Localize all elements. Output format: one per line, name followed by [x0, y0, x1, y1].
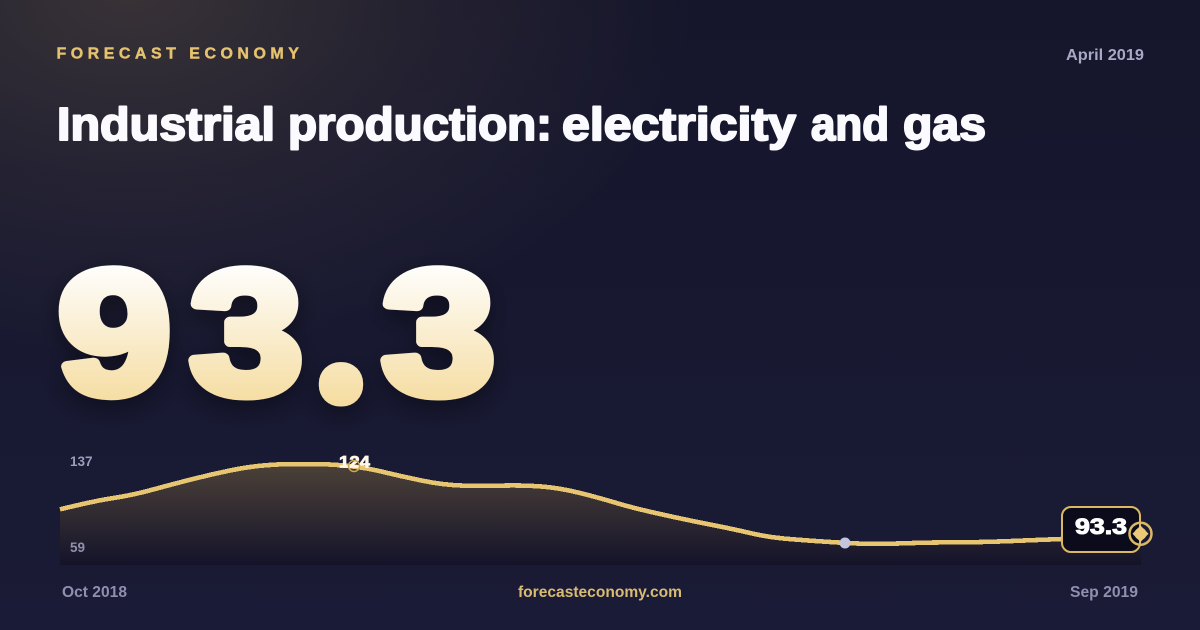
headline value: 933 [58, 235, 495, 431]
title: gas [903, 98, 986, 150]
title: production: [288, 98, 552, 150]
website: forecasteconomy.com [518, 584, 682, 601]
low marker [840, 538, 850, 548]
title: and [811, 98, 889, 150]
end date: Sep 2019 [1070, 584, 1138, 601]
line chart [60, 452, 1152, 565]
title [57, 98, 986, 150]
chart area [60, 464, 1141, 565]
chart line [60, 464, 1062, 544]
start date: Oct 2018 [62, 584, 127, 601]
brand label: FORECAST ECONOMY [56, 46, 302, 62]
value badge [1062, 507, 1140, 552]
axis min label: 59 [70, 540, 85, 555]
headline value: . [339, 372, 343, 390]
date: April 2019 [1066, 47, 1144, 64]
peak marker [348, 460, 360, 472]
value badge: 93.3 [1075, 514, 1127, 539]
axis max label: 137 [70, 454, 93, 469]
title: electricity [562, 98, 796, 150]
end marker [1130, 523, 1152, 545]
title: Industrial [57, 98, 275, 150]
peak label: 124 [339, 452, 371, 472]
